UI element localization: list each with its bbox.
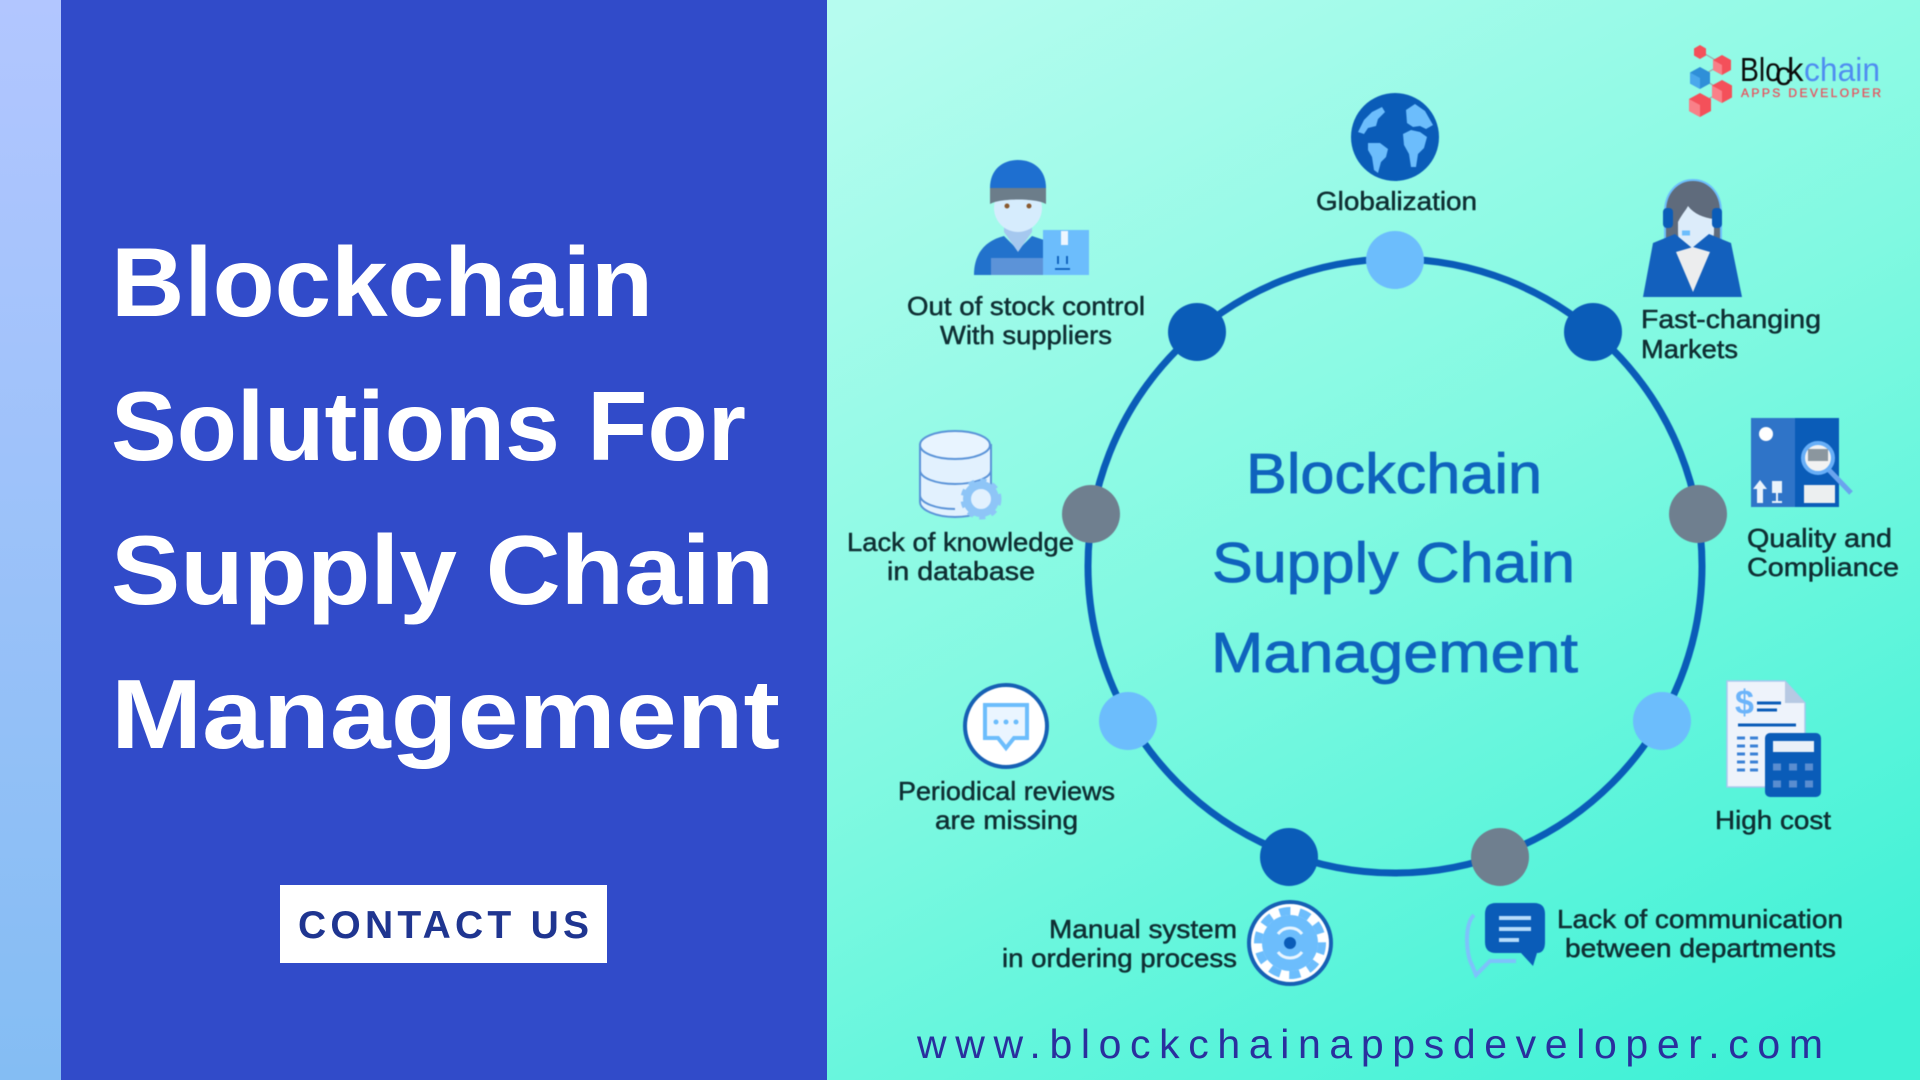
label: high cost: High cost (1715, 805, 1832, 835)
icon: parcel inspection (1751, 418, 1851, 507)
center heading: Blockchain (1246, 442, 1542, 506)
icon: delivery worker with box (974, 160, 1089, 275)
node: middle left grey (1062, 485, 1120, 543)
label: lack of knowledge: Lack of knowledge (847, 527, 1074, 557)
node: middle right grey (1669, 485, 1727, 543)
title: Management (111, 659, 780, 769)
label: lack of communication: between departments (1565, 933, 1836, 963)
panel: mint background (827, 0, 1920, 1080)
panel: blue title panel (61, 0, 827, 1080)
node: lower left light (1099, 692, 1157, 750)
label: periodical reviews: Periodical reviews (898, 776, 1115, 806)
label: quality and compliance: Compliance (1747, 552, 1899, 582)
contact button (280, 885, 607, 963)
icon: speech bubbles (1467, 903, 1545, 975)
icon: support agent (1643, 180, 1742, 297)
center heading (1211, 442, 1578, 685)
title: Solutions For (111, 371, 746, 481)
node: top light (1366, 231, 1424, 289)
icon: database with gear (920, 431, 999, 517)
label: fast-changing markets: Markets (1641, 334, 1738, 364)
label: out of stock control: Out of stock control (907, 291, 1145, 321)
label: quality and compliance: Quality and (1747, 523, 1892, 553)
icon: globe (1351, 93, 1439, 181)
label: lack of communication (1557, 904, 1843, 963)
node: bottom right grey (1471, 828, 1529, 886)
icon: invoice and calculator (1727, 681, 1821, 797)
logo: Blo (1740, 51, 1781, 88)
label: manual system: Manual system (1049, 914, 1237, 944)
logo: APPS DEVELOPER (1741, 86, 1881, 100)
label: fast-changing markets (1641, 304, 1821, 364)
website url: www.blockchainappsdeveloper.com (916, 1021, 1823, 1067)
icon: review chat circle (965, 685, 1047, 767)
title: Blockchain (111, 227, 653, 337)
label: quality and compliance (1747, 523, 1899, 582)
label: out of stock control: With suppliers (940, 320, 1112, 350)
center heading: Management (1211, 621, 1578, 685)
center heading: Supply Chain (1212, 531, 1575, 595)
label: lack of knowledge: in database (887, 556, 1035, 586)
label: fast-changing markets: Fast-changing (1641, 304, 1821, 334)
title (111, 227, 780, 769)
icon: invoice and calculator: $ (1735, 684, 1754, 722)
ring connecting the nodes (1088, 259, 1702, 873)
label: out of stock control (907, 291, 1145, 350)
left accent strip (0, 0, 62, 1080)
label: manual system: in ordering process (1002, 943, 1237, 973)
label: periodical reviews (898, 776, 1115, 835)
label: lack of communication: Lack of communication (1557, 904, 1843, 934)
label: globalization: Globalization (1316, 186, 1477, 216)
node: upper left dark (1168, 303, 1226, 361)
logo: k (1787, 51, 1804, 88)
node: lower right light (1633, 692, 1691, 750)
contact button: CONTACT US (298, 904, 589, 947)
label: manual system (1002, 914, 1237, 973)
label: lack of knowledge (847, 527, 1074, 586)
label: periodical reviews: are missing (935, 805, 1078, 835)
icon: gear circle (1249, 902, 1331, 984)
node: upper right dark (1564, 303, 1622, 361)
title: Supply Chain (111, 515, 774, 625)
logo: chain (1804, 51, 1880, 88)
logo (1689, 45, 1881, 117)
node: bottom left dark (1260, 828, 1318, 886)
logo: c (1775, 55, 1792, 92)
